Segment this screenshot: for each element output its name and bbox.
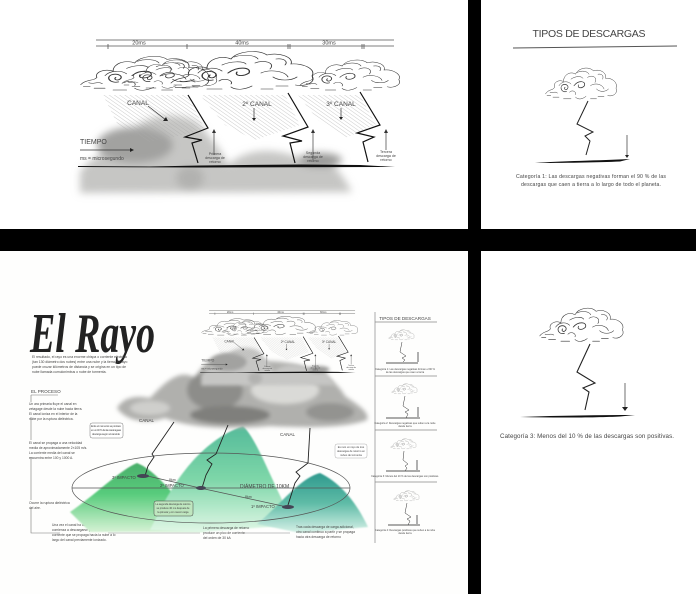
return stroke labels: Segunda [306, 151, 320, 155]
mountain labels: 2º IMPACTO [160, 483, 184, 488]
lightning bolts [185, 92, 380, 163]
mountain labels: 8km [169, 478, 176, 482]
panel: tipos de descargas column [371, 312, 439, 543]
icon: category 1 storm [535, 68, 630, 163]
mini type 4 [375, 491, 436, 535]
intro text: nube llamada cumulonimbus o nube de tormenta. [32, 370, 107, 374]
return stroke labels: retorno [307, 159, 319, 163]
mountain labels: CANAL [139, 418, 155, 423]
title: El Rayo: El Rayo [29, 303, 155, 365]
timeline labels: 40ms [235, 40, 249, 46]
section: el proceso: corriente que se propaga hacia la nube a lo [52, 533, 116, 537]
channel labels and arrows: 3º CANAL [326, 101, 356, 108]
section: el proceso: Un ara primaria fluye el canal en [29, 402, 77, 406]
heading rule [513, 46, 677, 48]
section: el proceso: El canal se propaga a una velocidad [29, 441, 82, 445]
intro text: (tan 130 diámetro dos nubes) entre una nube y la tierra. El rayo [32, 360, 127, 364]
section: el proceso: largo del canal previamente ionizado. [52, 538, 107, 542]
section: el proceso: media de aproximadamente 2×105 m/s. [29, 446, 87, 450]
callout: left: Entre el momento se produce [91, 424, 122, 428]
section: el proceso [29, 389, 116, 542]
mini type 1: de las descargas que caen a tierra [386, 371, 425, 374]
ground line [78, 164, 395, 168]
mini type 4: Categoría 4: Descargas positivas que suben a la nube [375, 529, 436, 532]
bottom notes: Tras cada descarga de carga adicional, [296, 525, 354, 529]
section: el proceso: comienza a descargarse por una onda [52, 528, 108, 532]
intro text: puede cruzar kilómetros de distancia y se origina en un tipo de [32, 365, 126, 369]
return stroke labels: retorno [209, 160, 221, 164]
callout: centre: la primera y con menor carga [158, 510, 189, 514]
return stroke labels: descarga de [205, 156, 225, 160]
top-right heading: tipos de descargas: TIPOS DE DESCARGAS [532, 28, 646, 40]
caption: category 3: Categoría 3: Menos del 10 % de las descargas son positivas. [500, 433, 674, 440]
lightning: main bottom bolts [145, 422, 310, 505]
mini type 2: Categoría 2: Descargas negativas que suben a la nube [374, 422, 436, 425]
mountain labels [112, 418, 296, 509]
bottom notes: hacia otra descarga de retorno [296, 535, 341, 539]
watercolor storm cloud [117, 354, 367, 428]
callout: right: descargas de retorno en [337, 449, 366, 453]
mountains [70, 426, 368, 533]
strike zone ellipse [72, 453, 350, 523]
section: el proceso: La corriente media del canal se [29, 451, 75, 455]
return stroke arrows [212, 129, 388, 160]
section: el proceso: zetagage desde la nube hacia tierra. [29, 407, 82, 411]
intro text: El resultado, el rayo es una enorme chispa o corriente eléctrica [32, 355, 127, 359]
mountain labels: 3º IMPACTO [112, 475, 136, 480]
mini type 1 [375, 330, 436, 374]
channel labels and arrows: 2º CANAL [242, 101, 272, 108]
caption: category 1 [516, 174, 666, 188]
panel: top-right background [481, 0, 696, 229]
callout: right: Es raro un rayo de tres [338, 445, 365, 449]
mini sequence diagram [200, 310, 358, 386]
column heading: TIPOS DE DESCARGAS [379, 316, 431, 321]
time legend: ms = microsegundo [80, 156, 124, 162]
channel labels and arrows: CANAL [127, 100, 149, 107]
callout: centre: se produce 40 ms después de [156, 506, 190, 510]
hatching under the cloud [103, 95, 376, 142]
callout: centre [154, 501, 193, 516]
bottom notes: produce un pico de corriente [203, 531, 245, 535]
impact markers [137, 474, 294, 509]
time legend [80, 139, 134, 162]
timeline [96, 40, 394, 49]
mountain: right [257, 473, 368, 533]
mini type 3: Categoría 3: Menos del 10 % de las descargas son positivas. [371, 475, 439, 478]
panel: bottom-right background [481, 251, 696, 594]
channel labels and arrows [127, 100, 356, 121]
return stroke labels [205, 150, 396, 164]
wash: grey watercolor ground [80, 116, 352, 193]
caption: category 1: descargas que caen a tierra a lo largo de todo el planeta. [521, 182, 661, 188]
callout: left: descarga según el canal de [92, 432, 121, 436]
mini type 2 [374, 384, 436, 428]
return stroke labels: Tercera [380, 150, 392, 154]
bottom notes [203, 525, 355, 540]
timeline labels: 20ms [132, 40, 146, 46]
timeline labels [132, 40, 336, 46]
callout line from process text [108, 532, 200, 534]
callout: left: en un 40 % de las canal aguas [91, 428, 122, 432]
section: el proceso: Ocurre la ruptura dieléctrica [29, 501, 70, 505]
return stroke labels: descarga de [376, 154, 396, 158]
diagram: time sequence of strokes [78, 40, 400, 193]
mountain labels: DIÁMETRO DE 10KM [240, 483, 289, 490]
mini type 4: desde tierra [398, 532, 412, 535]
callout: right: nubes de tormenta [340, 453, 362, 457]
mountain labels: 1º IMPACTO [251, 504, 275, 509]
mountain: left [70, 463, 205, 532]
section: el proceso: encuentra entre 100 y 1000 A. [29, 456, 73, 460]
panel: top-left background [0, 0, 468, 229]
section: el proceso: del aire. [29, 506, 41, 510]
mountain labels: CANAL [280, 432, 296, 437]
callout: centre: La segunda descarga de retorno [156, 502, 191, 506]
bottom notes: del orden de 30 kA [203, 536, 231, 540]
caption: category 1: Categoría 1: Las descargas negativas forman el 90 % de las [516, 174, 666, 180]
sketched cloud band [81, 52, 400, 90]
mini type 3 [371, 439, 439, 478]
section: el proceso: nube por la ruptura dieléctrica. [29, 417, 74, 421]
bottom notes: La primera descarga de retorno [203, 526, 249, 530]
return stroke labels: retorno [380, 158, 392, 162]
section: el proceso: EL PROCESO [31, 389, 61, 394]
time legend: TIEMPO [80, 139, 107, 146]
mountain: centre [150, 426, 295, 532]
mini type 1: Categoría 1: Las descargas negativas forman el 90 % [375, 368, 436, 371]
timeline labels: 30ms [322, 40, 336, 46]
intro text [32, 355, 127, 374]
section: el proceso: El canal ioniza en el interior de la [29, 412, 78, 416]
panel: bottom-left background [0, 251, 468, 594]
return stroke labels: Primera [209, 152, 221, 156]
bottom notes: otro canal continuo a partir y se propaga [296, 530, 355, 534]
mini type 2: desde tierra [398, 425, 412, 428]
mountain labels: 8km [245, 495, 252, 499]
return stroke labels: descarga de [303, 155, 323, 159]
callout: left [90, 423, 123, 438]
callout: right [335, 444, 367, 458]
section: el proceso: Una vez el canal ha contactado con tierra, [52, 523, 114, 527]
icon: category 3 storm [520, 308, 635, 418]
